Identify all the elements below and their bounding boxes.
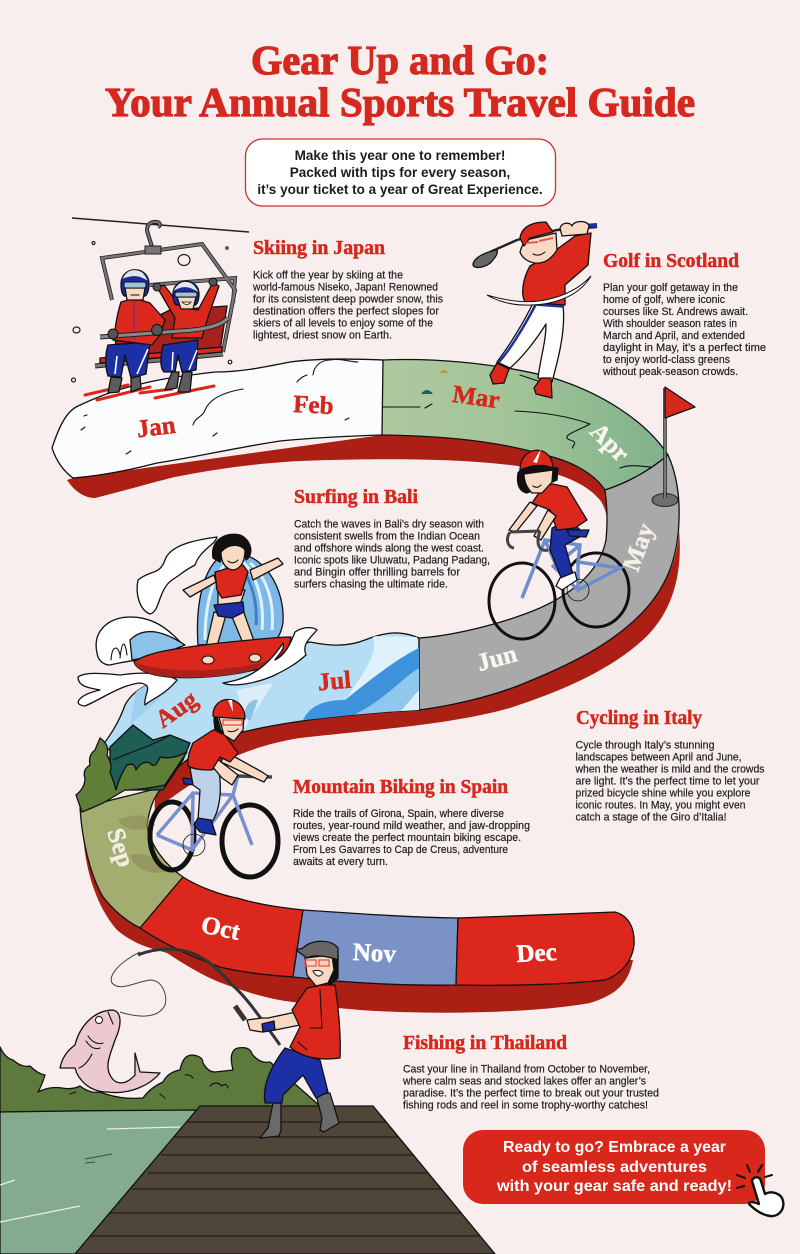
- month labels: Sep: [101, 825, 139, 870]
- wheels: [489, 563, 555, 639]
- trousers and shoe: [550, 524, 583, 580]
- month labels: Oct: [199, 911, 243, 946]
- text: Fishing in Thailand: [402, 1064, 659, 1112]
- head: [305, 955, 338, 985]
- text: Mountain Biking in Spain: From Les Gavarres to Cap de Creus, adventure: [293, 844, 508, 856]
- skier left: [85, 270, 165, 400]
- icon: golf flag: [652, 387, 695, 506]
- road side band: Sep to Dec: [83, 830, 633, 1013]
- illustration: fishing scene: [0, 941, 495, 1254]
- month labels: Mar: [451, 381, 501, 414]
- rod: [138, 949, 280, 1045]
- text: Surfing in Bali: and Bingin offer thrilling barrels for: [294, 566, 460, 578]
- arms: [207, 752, 268, 785]
- text: Cycling in Italy: when the weather is mild and the crowds: [575, 764, 765, 776]
- trousers: [190, 767, 220, 822]
- text: Cycling in Italy: catch a stage of the Giro d’Italia!: [576, 812, 726, 824]
- title: [105, 37, 695, 125]
- month labels: Aug: [151, 686, 203, 734]
- call to action: [463, 1130, 783, 1216]
- road side band: Jan to May: [67, 435, 608, 525]
- call to action: Ready to go? Embrace a year: [503, 1139, 726, 1156]
- text: Cycling in Italy: are light. It’s the perfect time to let your: [576, 776, 760, 788]
- road segment: Nov: [293, 910, 458, 985]
- text: Golf in Scotland: Plan your golf getaway in the: [603, 282, 738, 294]
- swing swoosh: [487, 276, 591, 305]
- text: Surfing in Bali: surfers chasing the ultimate ride.: [294, 578, 448, 590]
- golf course details: [383, 375, 660, 468]
- torso and arm: [523, 233, 591, 305]
- text: Surfing in Bali: [294, 518, 490, 590]
- text: Skiing in Japan: lightest, driest snow on Earth.: [253, 330, 392, 342]
- lap bar: [100, 318, 228, 337]
- snowflakes: [72, 242, 232, 382]
- heading: Fishing in Thailand: Fishing in Thailand: [403, 1032, 567, 1054]
- mountains and trees: [76, 725, 190, 812]
- illustration: surfer on wave: [78, 534, 317, 706]
- month labels: Nov: [352, 939, 397, 968]
- handlebar: [236, 776, 272, 777]
- text: Cycling in Italy: prized bicycle shine while you explore: [576, 788, 750, 800]
- call to action: with your gear safe and ready!: [496, 1178, 732, 1195]
- text: Mountain Biking in Spain: views create the perfect mountain biking escape.: [293, 832, 521, 844]
- illustration: golfer: [473, 222, 597, 398]
- text: Skiing in Japan: [252, 270, 443, 342]
- handlebar: [507, 531, 548, 550]
- road segment: Oct: [140, 877, 303, 977]
- frame: [157, 775, 252, 850]
- illustration: mountain biker: [150, 699, 278, 877]
- month labels: Jul: [317, 667, 352, 696]
- left wave: [96, 617, 183, 665]
- fishing line: [111, 952, 166, 1016]
- head and hair: [213, 534, 251, 562]
- heading: Mountain Biking in Spain: Mountain Biking in Spain: [293, 776, 508, 798]
- text: Skiing in Japan: skiers of all levels to enjoy some of the: [253, 318, 433, 330]
- title: Gear Up and Go:: [251, 37, 549, 83]
- legs: [203, 610, 260, 660]
- road segment: Dec: [456, 912, 634, 985]
- road segment: Sep olive: [80, 787, 183, 928]
- arms: [509, 502, 556, 540]
- text: Surfing in Bali: consistent swells from the Indian Ocean: [294, 530, 480, 542]
- heading: Skiing in Japan: Skiing in Japan: [253, 237, 385, 259]
- road segment: Jan Feb snow: [52, 359, 384, 478]
- dock: [75, 1106, 495, 1254]
- text: Cycling in Italy: landscapes between April and June,: [576, 752, 742, 764]
- frame: [522, 540, 620, 598]
- intro callout: Packed with tips for every season,: [290, 165, 510, 180]
- head: [517, 464, 558, 493]
- heading: Surfing in Bali: Surfing in Bali: [294, 486, 418, 508]
- text: Cycling in Italy: Cycle through Italy’s stunning: [576, 740, 714, 752]
- text: Surfing in Bali: Catch the waves in Bali’s dry season with: [294, 518, 484, 530]
- golf club: [490, 227, 597, 252]
- lake: [0, 1110, 197, 1254]
- illustration: cyclist on May road: [489, 449, 629, 639]
- text: Surfing in Bali: and offshore winds along the west coast.: [294, 542, 484, 554]
- arm: [247, 1012, 300, 1032]
- text: Skiing in Japan: world-famous Niseko, Japan! Renowned: [252, 282, 438, 294]
- wheels: [150, 802, 194, 870]
- road segment: May Jun grey: [419, 455, 679, 710]
- seat: [567, 530, 589, 537]
- shoes: [490, 363, 552, 398]
- text: Golf in Scotland: daylight in May, it’s a perfect time: [603, 342, 766, 354]
- month labels: Jan: [135, 412, 177, 443]
- title: Your Annual Sports Travel Guide: [105, 79, 695, 125]
- text: Mountain Biking in Spain: [293, 808, 530, 868]
- road segment: Jul Aug water: [103, 633, 419, 787]
- text: Golf in Scotland: With shoulder season rates in: [603, 318, 737, 330]
- text: Golf in Scotland: March and April, and extended: [603, 330, 745, 342]
- head: [520, 233, 557, 263]
- fish: [60, 1010, 160, 1093]
- month labels: Feb: [293, 391, 334, 420]
- hands: [560, 222, 589, 236]
- month labels: Apr: [585, 418, 634, 467]
- water streaks: [130, 636, 419, 728]
- intro callout: it’s your ticket to a year of Great Experience.: [257, 182, 543, 197]
- text: Mountain Biking in Spain: Ride the trails of Girona, Spain, where diverse: [293, 808, 504, 820]
- text: Golf in Scotland: home of golf, where iconic: [603, 294, 725, 306]
- illustration: chairlift with two skiers: [72, 218, 249, 400]
- wave back: [197, 553, 283, 645]
- text: Mountain Biking in Spain: routes, year-round mild weather, and jaw-dropping: [293, 820, 530, 832]
- right splash: [223, 628, 317, 685]
- text: Cycling in Italy: [575, 740, 765, 824]
- skier right: [140, 278, 219, 398]
- seat: [183, 778, 200, 785]
- call to action: of seamless adventures: [522, 1159, 707, 1176]
- text: Golf in Scotland: [602, 282, 766, 378]
- trousers: [264, 1048, 328, 1103]
- icon: pointer hand: [737, 1165, 783, 1216]
- road segment: Mar Apr green: [382, 360, 668, 490]
- month labels: Jun: [474, 640, 520, 677]
- shirt: [532, 484, 587, 530]
- trousers: [497, 303, 564, 382]
- mud patches: [118, 815, 165, 873]
- text: Golf in Scotland: to enjoy world-class greens: [603, 354, 730, 366]
- torso: [183, 558, 283, 605]
- month labels: Dec: [516, 939, 557, 968]
- foam top: [137, 537, 217, 614]
- month labels: [101, 381, 660, 968]
- feet: [202, 656, 214, 664]
- shoe: [194, 818, 216, 835]
- surfboard: [134, 637, 291, 678]
- month labels: May: [618, 520, 660, 575]
- text: Skiing in Japan: for its consistent deep powder snow, this: [253, 294, 443, 306]
- heading: Golf in Scotland: Golf in Scotland: [603, 250, 739, 272]
- intro callout: Make this year one to remember!: [295, 148, 505, 163]
- trees: [0, 1047, 320, 1112]
- text: Golf in Scotland: without peak-season crowds.: [602, 366, 738, 378]
- splash left: [78, 673, 177, 706]
- intro callout: [246, 139, 556, 206]
- text: Fishing in Thailand: paradise. It’s the perfect time to break out your trusted: [403, 1088, 659, 1100]
- text: Golf in Scotland: courses like St. Andrews await.: [603, 306, 748, 318]
- text: Fishing in Thailand: where calm seas and stocked lakes offer an angler’s: [402, 1076, 646, 1088]
- heading: Cycling in Italy: Cycling in Italy: [576, 707, 702, 729]
- snow strokes: [81, 359, 358, 454]
- text: Cycling in Italy: iconic routes. In May, you might even: [576, 800, 746, 812]
- text: Surfing in Bali: Iconic spots like Uluwatu, Padang Padang,: [294, 554, 490, 566]
- boots: [260, 1093, 339, 1138]
- text: Fishing in Thailand: fishing rods and reel in some trophy-worthy catches!: [403, 1100, 648, 1112]
- text: Skiing in Japan: Kick off the year by skiing at the: [253, 270, 403, 282]
- head: [214, 710, 222, 734]
- shirt: [188, 730, 238, 770]
- text: Skiing in Japan: destination offers the perfect slopes for: [253, 306, 439, 318]
- shirt: [290, 985, 340, 1059]
- text: Fishing in Thailand: Cast your line in Thailand from October to November,: [403, 1064, 650, 1076]
- winding year road: [52, 359, 680, 1013]
- text: Mountain Biking in Spain: awaits at every turn.: [293, 856, 388, 868]
- road side band: May to Sep: [155, 530, 680, 812]
